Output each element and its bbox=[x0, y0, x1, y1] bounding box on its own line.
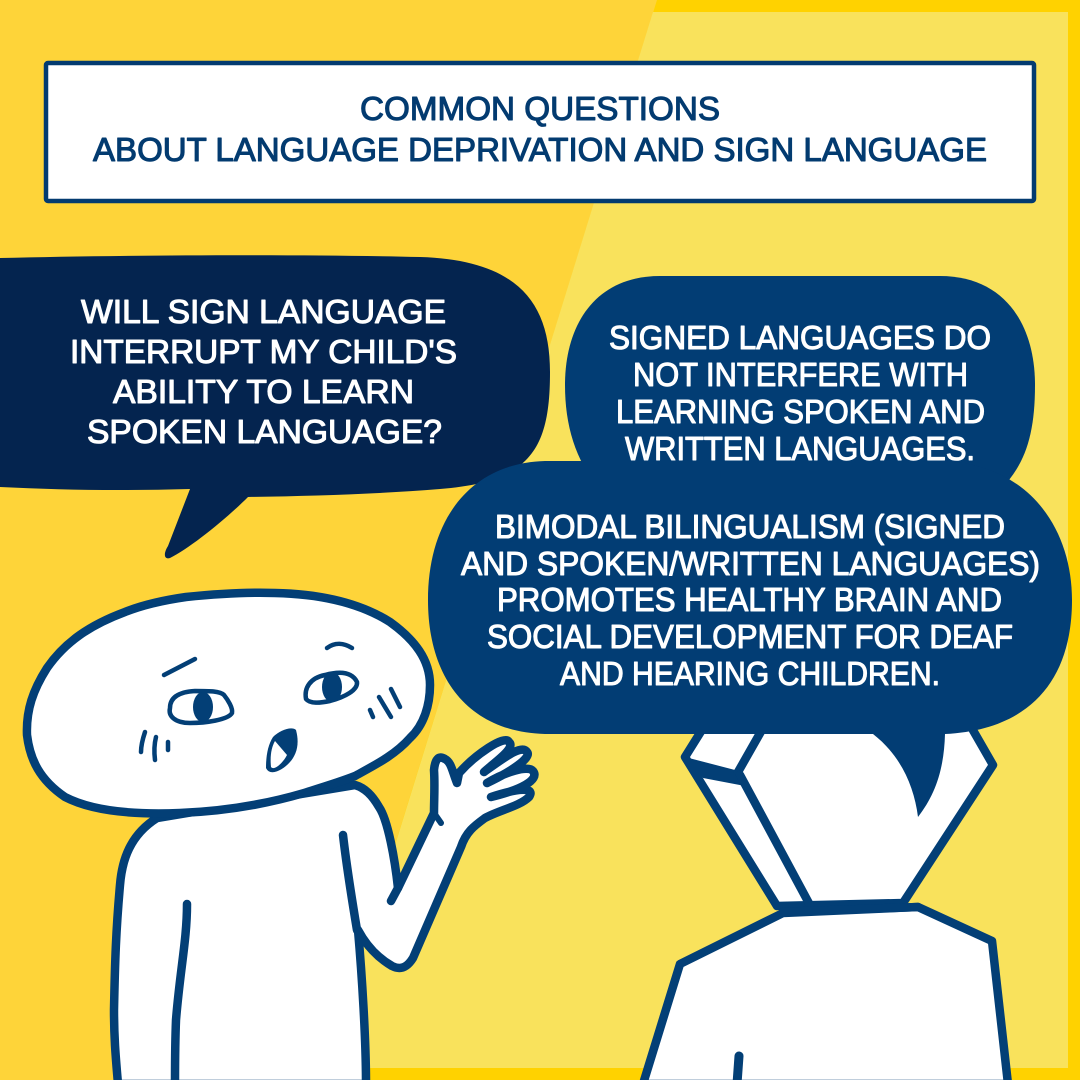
hair line upper bbox=[738, 728, 763, 772]
answer 1 text: WRITTEN LANGUAGES. bbox=[625, 430, 975, 467]
answer 1 text bbox=[609, 319, 991, 467]
title line 2: ABOUT LANGUAGE DEPRIVATION AND SIGN LANGUAGE bbox=[93, 131, 987, 168]
answer 1 text: NOT INTERFERE WITH bbox=[633, 356, 968, 393]
answer 1 text: LEARNING SPOKEN AND bbox=[616, 393, 985, 430]
right figure: character seen from behind bbox=[643, 725, 1008, 1080]
left figure body and arm bbox=[114, 740, 534, 1080]
title line 1: COMMON QUESTIONS bbox=[360, 90, 720, 127]
body centre line bbox=[175, 904, 187, 1080]
answer 1 text: SIGNED LANGUAGES DO bbox=[609, 319, 991, 356]
left eye bbox=[170, 691, 232, 723]
right eyebrow bbox=[327, 644, 352, 648]
question text: INTERRUPT MY CHILD'S bbox=[70, 333, 457, 370]
question text: WILL SIGN LANGUAGE bbox=[81, 293, 446, 330]
speech bubble: question bbox=[0, 255, 550, 558]
collar line bbox=[783, 907, 918, 912]
question text bbox=[70, 293, 457, 450]
answer 2 text: AND HEARING CHILDREN. bbox=[560, 655, 940, 692]
mouth bbox=[266, 728, 298, 772]
left figure: seated character asking bbox=[27, 593, 534, 1080]
right figure head bbox=[685, 725, 993, 906]
hair line lower bbox=[740, 775, 811, 907]
background: left yellow panel bbox=[0, 0, 657, 1080]
right figure body bbox=[643, 907, 1008, 1080]
answer 2 text: PROMOTES HEALTHY BRAIN AND bbox=[497, 581, 1002, 618]
answer 2 text: SOCIAL DEVELOPMENT FOR DEAF bbox=[487, 618, 1013, 655]
right cheek marks bbox=[370, 689, 400, 717]
answer 2 text bbox=[461, 508, 1040, 692]
question text: SPOKEN LANGUAGE? bbox=[87, 413, 442, 450]
wrist tick bbox=[434, 813, 441, 823]
back centre line bbox=[737, 1056, 739, 1080]
answer 2 text: BIMODAL BILINGUALISM (SIGNED bbox=[495, 508, 1005, 545]
background: right pale yellow panel bbox=[326, 12, 1068, 1068]
title box bbox=[46, 63, 1034, 201]
speech bubble: answer 2 bbox=[428, 461, 1072, 817]
arm crease bbox=[343, 835, 357, 930]
arm inner end bbox=[391, 888, 398, 901]
left eyebrow bbox=[164, 659, 195, 675]
speech bubble: answer 1 bbox=[565, 276, 1035, 490]
right eye bbox=[306, 672, 357, 703]
left cheek marks bbox=[141, 732, 168, 760]
hair shading band bbox=[685, 757, 745, 786]
head bbox=[27, 593, 430, 813]
answer 2 text: AND SPOKEN/WRITTEN LANGUAGES) bbox=[461, 545, 1040, 582]
question text: ABILITY TO LEARN bbox=[113, 373, 414, 410]
